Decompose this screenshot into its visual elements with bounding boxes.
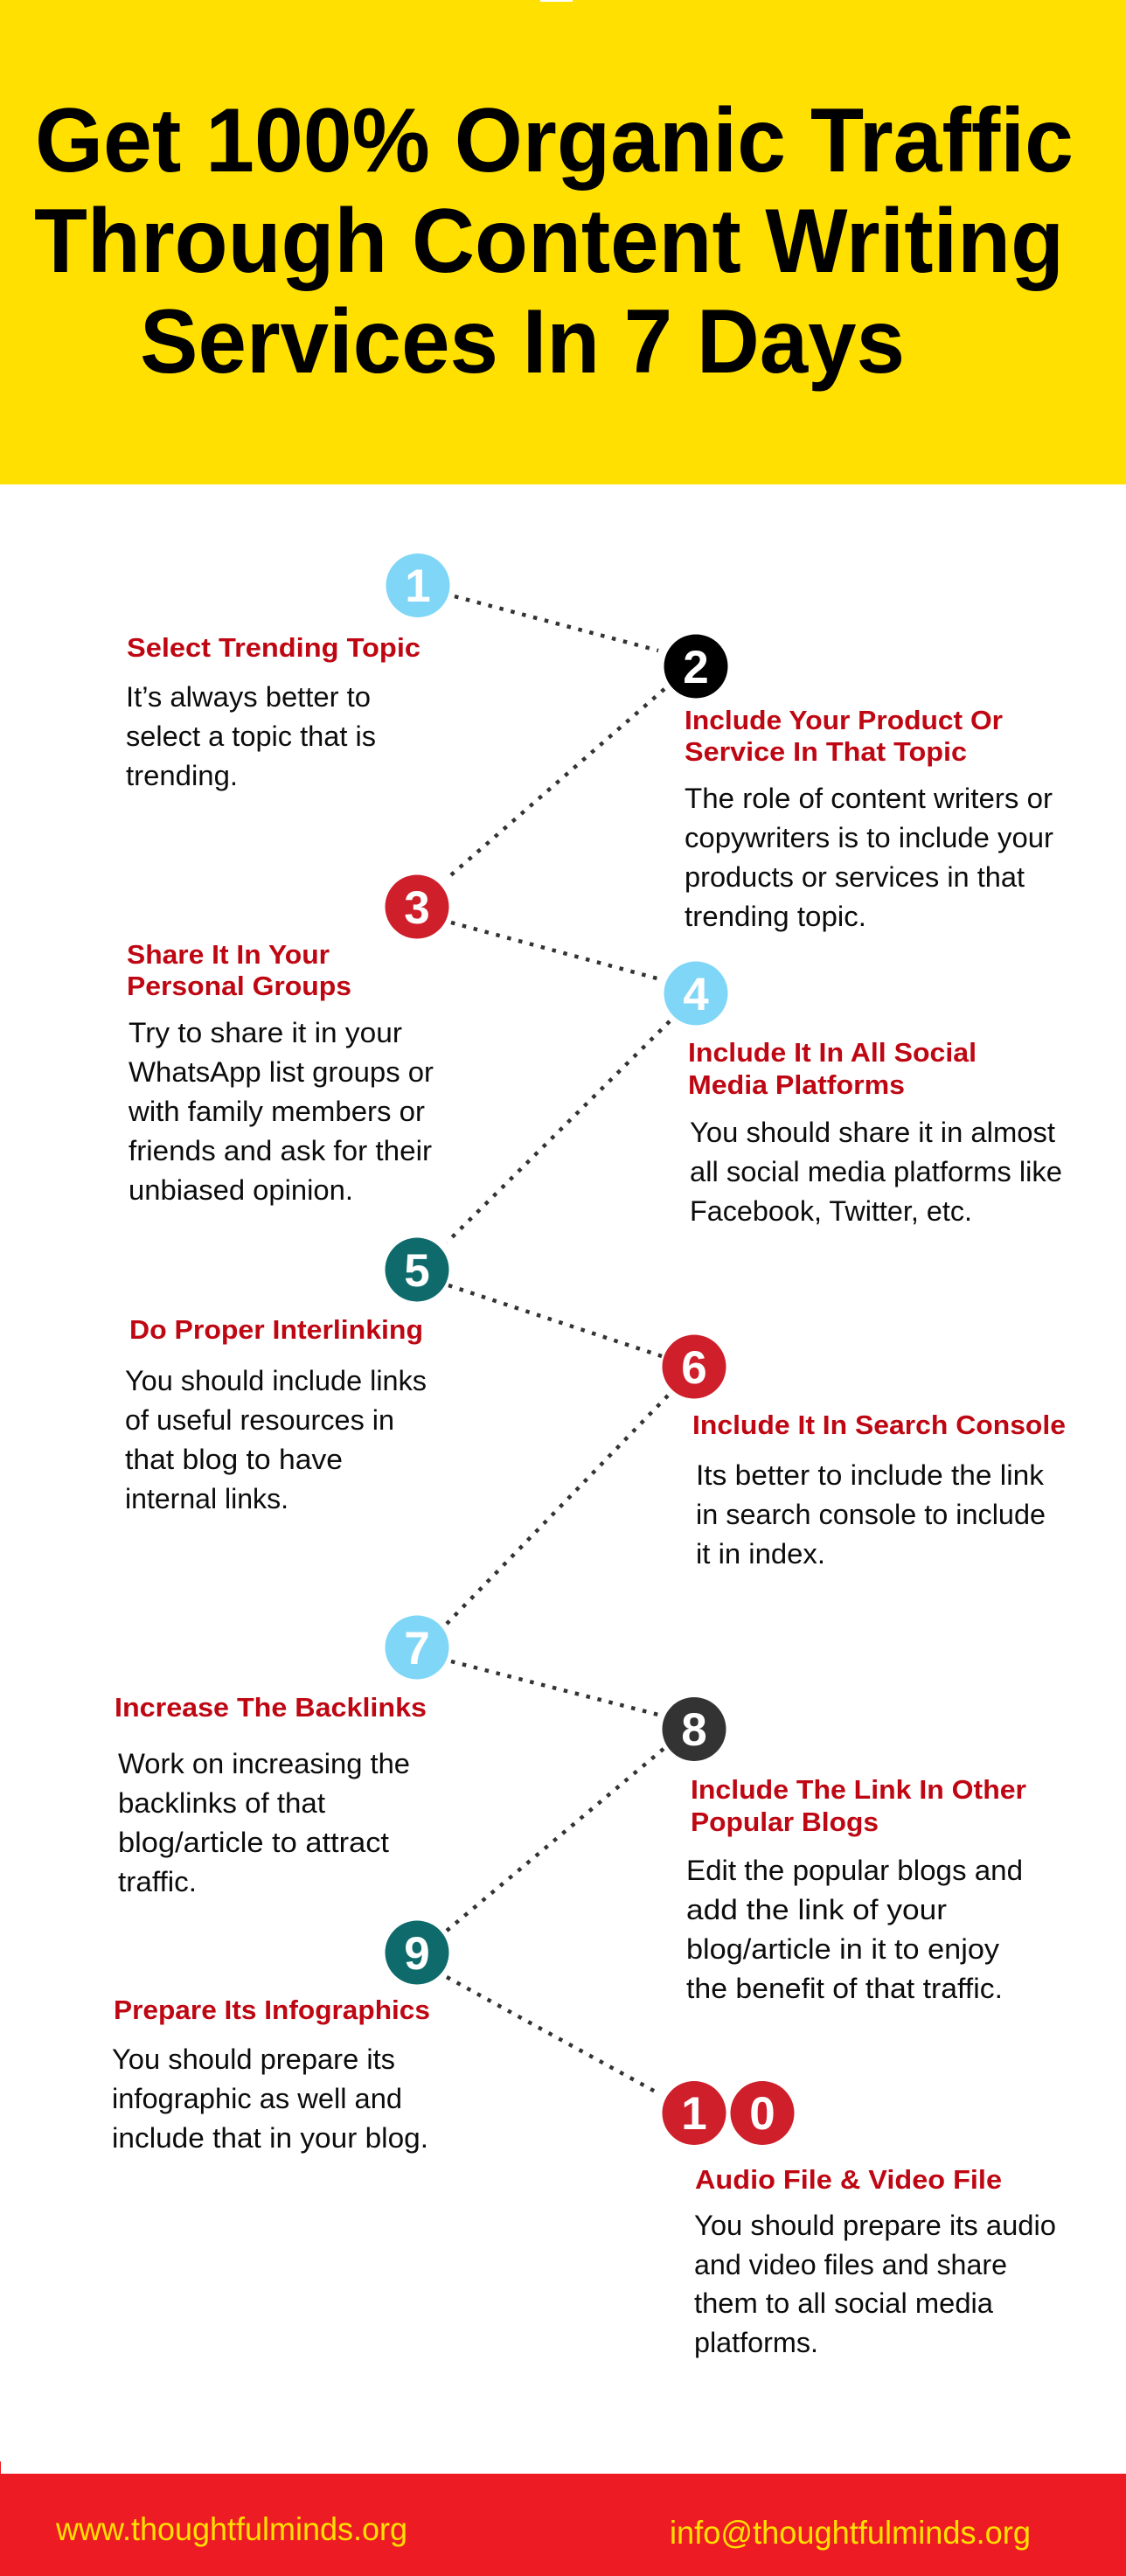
- header banner: [0, 0, 1126, 484]
- step 6: it in index.: [696, 1538, 825, 1570]
- step 10: platforms.: [694, 2327, 818, 2358]
- step 8: Include The Link In Other: [691, 1775, 1026, 1805]
- step 2: Service In That Topic: [685, 737, 967, 767]
- step 10: [663, 2081, 1056, 2358]
- step 2: 2: [683, 642, 709, 693]
- step 7: backlinks of that: [118, 1787, 325, 1819]
- title: Get 100% Organic Traffic: [35, 90, 1074, 191]
- step 8: Popular Blogs: [691, 1807, 879, 1837]
- step 4: Media Platforms: [688, 1070, 905, 1100]
- step 8: [663, 1697, 1026, 2004]
- step 4: all social media platforms like: [690, 1156, 1062, 1187]
- footer band: [0, 2461, 1126, 2576]
- step 3: [127, 874, 449, 1206]
- step 7: Work on increasing the: [118, 1748, 410, 1779]
- website link: www.thoughtfulminds.org: [55, 2511, 407, 2547]
- step 1: 1: [405, 560, 431, 612]
- step 8: 8: [681, 1704, 707, 1756]
- step 10: You should prepare its audio: [694, 2210, 1056, 2241]
- step 6: 6: [681, 1342, 707, 1394]
- step 7: [115, 1616, 449, 1897]
- step 5: 5: [404, 1245, 430, 1297]
- step 8: add the link of your: [686, 1894, 947, 1925]
- step 7: 7: [404, 1623, 430, 1674]
- step 7: blog/article to attract: [118, 1827, 389, 1858]
- step 8: the benefit of that traffic.: [686, 1973, 1003, 2004]
- step 3: with family members or: [128, 1096, 425, 1127]
- step 2: trending topic.: [685, 901, 866, 932]
- step 1: select a topic that is: [126, 721, 376, 752]
- step 5: You should include links: [125, 1365, 427, 1396]
- step 3: 3: [404, 882, 430, 934]
- step 1: trending.: [126, 760, 238, 791]
- step 3: Try to share it in your: [129, 1017, 402, 1048]
- step 3: friends and ask for their: [129, 1135, 432, 1166]
- step 9: 9: [404, 1928, 430, 1980]
- step 2: [664, 635, 1053, 932]
- step 5: internal links.: [125, 1483, 288, 1514]
- step 7: traffic.: [118, 1866, 197, 1897]
- step 9: Prepare Its Infographics: [114, 1995, 430, 2025]
- step 6: [663, 1334, 1066, 1570]
- step 10: 1: [681, 2088, 707, 2140]
- step 6: Include It In Search Console: [692, 1410, 1066, 1440]
- step 3: WhatsApp list groups or: [129, 1056, 434, 1088]
- step 10: and video files and share: [694, 2249, 1007, 2280]
- step 5: Do Proper Interlinking: [129, 1315, 423, 1345]
- step 4: You should share it in almost: [690, 1117, 1055, 1148]
- step 4: 4: [683, 969, 709, 1020]
- step 5: of useful resources in: [125, 1404, 394, 1436]
- step 4: Facebook, Twitter, etc.: [690, 1195, 972, 1227]
- dotted connector path: [447, 596, 670, 2094]
- email address: info@thoughtfulminds.org: [670, 2515, 1031, 2551]
- step 1: Select Trending Topic: [127, 633, 421, 663]
- step 9: infographic as well and: [112, 2083, 402, 2114]
- step 10: Audio File & Video File: [695, 2165, 1002, 2195]
- step 2: products or services in that: [685, 861, 1025, 893]
- step 8: blog/article in it to enjoy: [686, 1933, 999, 1965]
- step 9: You should prepare its: [112, 2043, 395, 2075]
- step 10: them to all social media: [694, 2287, 993, 2319]
- title: [34, 90, 1074, 393]
- step 9: [112, 1920, 449, 2154]
- step 7: Increase The Backlinks: [115, 1693, 427, 1723]
- step 2: Include Your Product Or: [685, 706, 1003, 735]
- step 3: Share It In Your: [127, 940, 330, 970]
- step 4: [664, 962, 1062, 1227]
- title: Through Content Writing: [34, 191, 1064, 292]
- title: Services In 7 Days: [140, 291, 905, 393]
- step 5: [125, 1238, 449, 1514]
- step 4: Include It In All Social: [688, 1038, 977, 1068]
- step 1: It’s always better to: [126, 681, 371, 713]
- step 2: copywriters is to include your: [685, 822, 1053, 853]
- step 2: The role of content writers or: [685, 783, 1053, 814]
- step 8: Edit the popular blogs and: [686, 1855, 1023, 1886]
- step 5: that blog to have: [125, 1444, 343, 1475]
- step 9: include that in your blog.: [112, 2122, 428, 2154]
- step 6: in search console to include: [696, 1499, 1046, 1530]
- step 6: Its better to include the link: [696, 1459, 1045, 1491]
- step 3: Personal Groups: [127, 971, 351, 1001]
- step 1: [126, 553, 449, 791]
- step 3: unbiased opinion.: [129, 1174, 353, 1206]
- step 10: 0: [749, 2088, 775, 2140]
